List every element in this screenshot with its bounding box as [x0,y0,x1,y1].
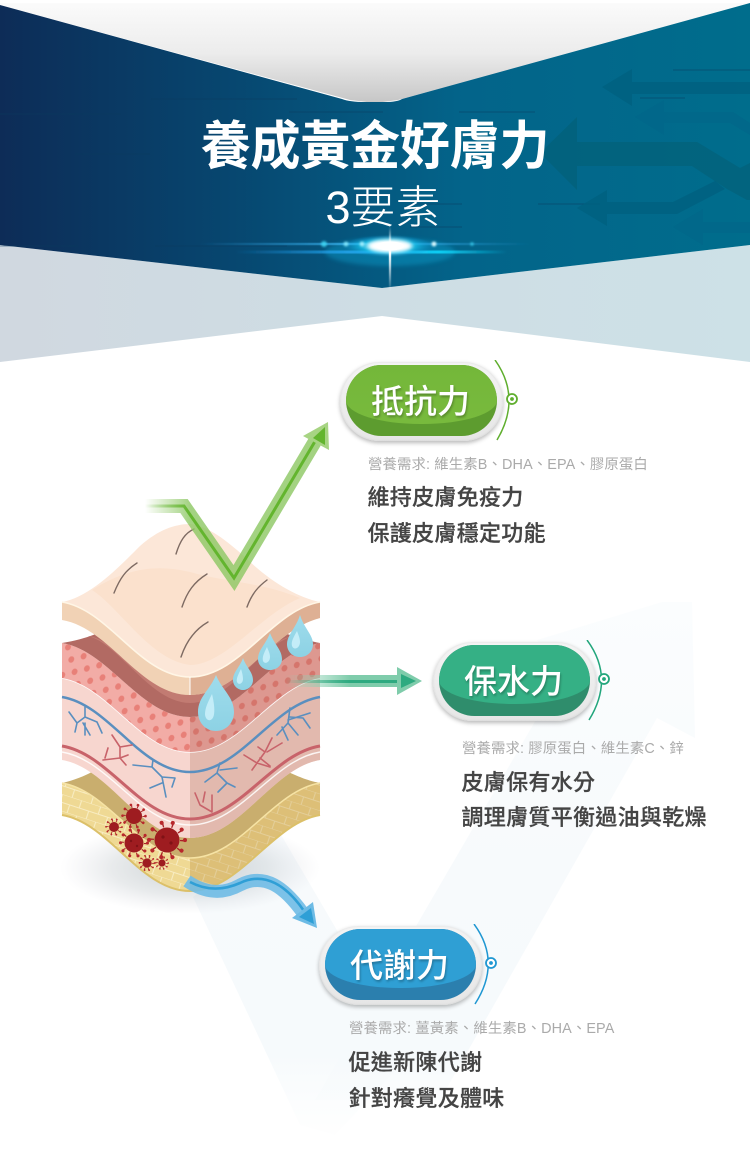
text: 保水力 details: 調理膚質平衡過油與乾燥 [462,805,707,830]
viruses [106,804,185,870]
badge: 保水力: 保水力 [464,662,563,700]
blue arrow [187,879,317,928]
dark under-layer [62,632,320,717]
badge: 抵抗力 [338,360,518,446]
hairs [114,529,267,657]
text: 抵抗力 details [368,456,648,546]
light flare [200,226,530,292]
red capillaries [103,735,282,812]
text: 保水力 details: 營養需求: 膠原蛋白、維生素C、鋅 [462,741,684,757]
pink dotted layer [62,643,320,752]
fat layer [62,772,320,891]
header background [0,3,750,362]
ground shadow [60,822,320,914]
text: 代謝力 details: 針對癢覺及體味 [348,1086,505,1111]
text: 抵抗力 details: 營養需求: 維生素B、DHA、EPA、膠原蛋白 [368,457,648,473]
dermis layer [62,678,320,838]
blue capillaries [69,707,310,797]
green check arrow [145,422,329,578]
title: 養成黃金好膚力 [201,117,549,175]
text: 保水力 details [462,740,707,830]
text: 抵抗力 details: 維持皮膚免疫力 [368,485,524,510]
text: 保水力 details: 皮膚保有水分 [462,770,595,795]
badge: 代謝力: 代謝力 [350,946,449,984]
epidermis top layer [62,524,320,695]
text: 抵抗力 details: 保護皮膚穩定功能 [368,521,546,546]
teal arrow [285,667,422,695]
subtitle: 3要素 [325,182,441,233]
badge: 抵抗力: 抵抗力 [371,382,470,420]
water drops [198,615,313,731]
text: 代謝力 details [348,1020,614,1111]
text: 代謝力 details: 營養需求: 薑黃素、維生素B、DHA、EPA [349,1021,614,1037]
text: 代謝力 details: 促進新陳代謝 [348,1050,482,1075]
badge: 代謝力 [316,924,497,1010]
badge: 保水力 [430,640,610,726]
